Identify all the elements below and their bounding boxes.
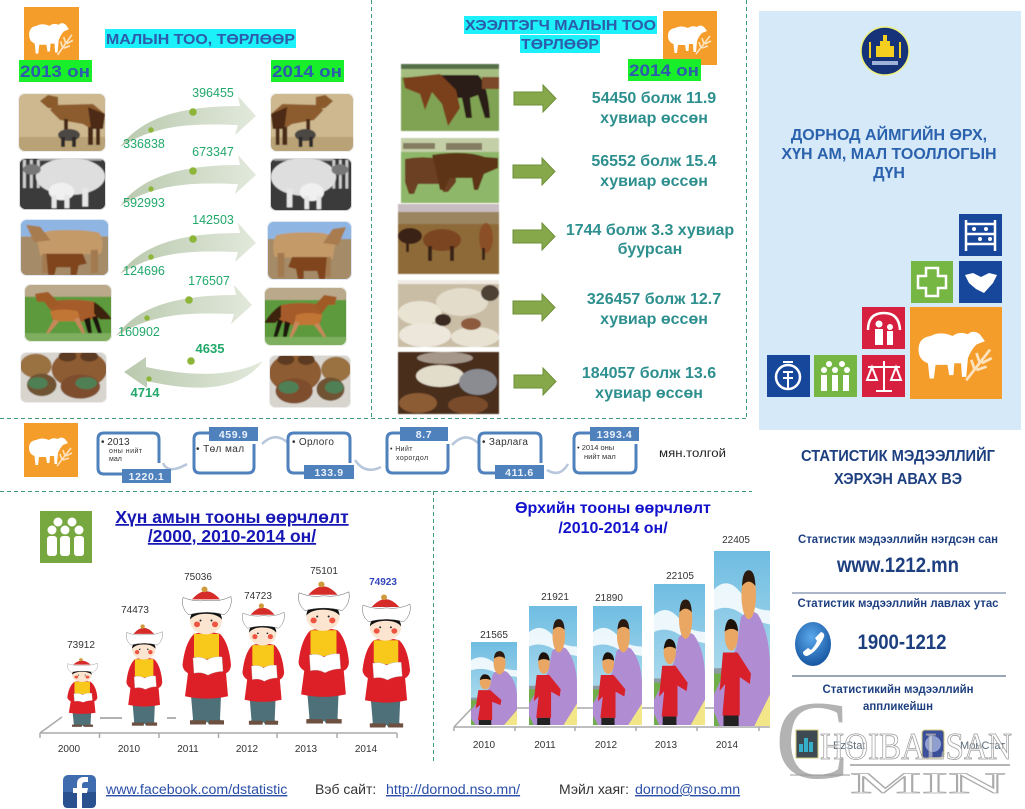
icon: facebook [63,775,96,808]
value labels [67,566,397,651]
bar: 2010 [471,642,517,725]
value labels: 74473 [121,605,149,616]
connectors [163,437,568,473]
heading line 2: ХЭРХЭН АВАХ ВЭ [834,471,962,488]
heading: population change: /2000, 2010-2014 он/ [148,526,316,546]
arrow: sheep [513,294,555,321]
icon: sheep [663,11,717,65]
photo: goats [398,352,499,414]
figure: 2013 [298,581,349,724]
text: sheep change: 326457 болж 12.7 [587,291,721,308]
flow box: 2014 total: нийт мал [584,452,616,461]
panel: how to get statistics [792,446,1006,758]
bar: 2012 [593,606,642,725]
chart axis [454,708,770,731]
photo: mares [401,64,499,131]
bar: 2014 [714,551,770,726]
heading: report title: ДОРНОД АЙМГИЙН ӨРХ, [791,127,987,144]
arrow: camels: 4635 [196,341,224,356]
icon: people [814,355,857,397]
value labels: 74923 [369,577,397,588]
text: phone number: 1900-1212 [858,631,946,654]
icon: health cross [911,261,953,303]
value labels: 22105 [666,571,694,582]
text: MonStat: МонСтат [960,740,1005,752]
photo: horses 2014 [264,287,347,346]
panel: report cover [759,11,1021,430]
year labels [473,740,739,751]
text: application label: Статистикийн мэдээллийн [822,682,974,696]
year labels: 2012 [236,744,259,755]
value labels: 73912 [67,640,95,651]
arrow: horses: 176507 [188,274,230,288]
arrow: camels [124,341,263,400]
heading: how to get statistics: СТАТИСТИК МЭДЭЭЛЛИЙГ [801,446,995,465]
icon: medal [767,355,810,397]
year labels: 2000 [58,744,81,755]
icon: statistics emblem [861,27,909,75]
icon: phone [795,622,831,666]
text: phone label: Статистик мэдээллийн лавлах утас [798,596,999,610]
flow box: 2013 total: 1220.1 [129,471,164,483]
value labels: 21921 [541,592,569,603]
label: email: Мэйл хаяг: [559,781,629,797]
icon: EzStat [796,730,818,758]
panel: population chart [40,507,410,755]
arrow: sheep: 673347 [192,145,234,159]
flow box: 2014 total [574,427,639,473]
text: mares change: хувиар өссөн [600,110,708,127]
photo: camels 2014 [269,353,351,408]
photo: horses 2013 [24,284,112,342]
text: cows change: 56552 болж 15.4 [591,153,717,170]
icon: handshake [959,261,1002,303]
flow box: income [288,433,354,479]
flow box: 2014 total: • 2014 оны [577,443,614,452]
flow box: expense: 411.6 [505,467,534,479]
icon: sheep large [910,307,1002,399]
link: facebook: www.facebook.com/dstatistic [105,782,287,798]
arrow: goats [514,368,556,395]
label: 2013: 2013 он [20,62,90,81]
icon: MonStat [922,730,944,758]
icon: scales [862,355,905,397]
panel: households chart [454,500,770,751]
photo: goats 2013 [18,93,106,152]
figure: 2011 [182,586,231,725]
text: camels change: 1744 болж 3.3 хувиар [566,222,734,239]
year labels: 2011 [534,740,556,751]
heading: breeding stock [464,16,657,53]
text: cows change: хувиар өссөн [600,173,708,190]
value labels: 74723 [244,591,272,602]
flow box: newborn: • Төл мал [196,444,244,455]
arrow: goats: 336838 [123,137,165,151]
arrow: cows [513,158,555,185]
photo: camels [398,204,499,274]
link: email: dornod@nso.mn [635,782,740,798]
text: sheep change: хувиар өссөн [600,311,708,328]
photo: white sheep 2013 [19,158,106,210]
text: application label line 2: аппликейшн [863,699,933,713]
chart axis [40,717,397,738]
flow box: expense: • Зарлага [482,437,528,448]
label: 2014: 2014 он [629,61,699,80]
flow box: newborn: 459.9 [219,429,248,441]
text: camels change: буурсан [618,241,682,258]
year labels: 2010 [473,740,496,751]
icon: people [40,511,92,563]
year labels: 2013 [295,744,318,755]
flow box: expense [479,433,544,479]
photo: sheep [398,280,499,347]
year labels: 2014 [355,744,378,755]
text: website: www.1212.mn [836,554,959,577]
arrow: cattle [120,213,256,278]
year labels: 2010 [118,744,141,755]
arrow: sheep: 592993 [123,196,165,210]
flow box: income: • Орлого [292,437,334,448]
arrow: camels: 4714 [131,385,160,400]
value labels: 75101 [310,566,338,577]
year labels [58,744,378,755]
value labels [480,535,750,641]
arrow: cattle: 142503 [192,213,234,227]
watermark [775,679,1012,803]
flow box: losses: хорогдол [396,455,428,462]
figure: 2012 [242,603,284,725]
heading: breeding stock: ХЭЭЛТЭГЧ МАЛЫН ТОО [465,17,656,34]
flow box: 2014 total: 1393.4 [597,429,632,441]
year labels: 2013 [655,740,678,751]
photo: cattle 2013 [20,219,109,276]
bar: 2013 [654,584,705,725]
arrow: sheep [120,145,256,210]
panel: livestock by type 2013 vs 2014 [18,7,354,408]
year labels: 2011 [177,744,199,755]
link: website: http://dornod.nso.mn/ [386,782,520,798]
photo: cattle 2014 [267,221,352,280]
label: website: Вэб сайт: [315,781,376,797]
text: goats change: хувиар өссөн [595,385,703,402]
flow box: losses [387,427,448,473]
unit label: мян.толгой [659,448,726,460]
watermark: C [775,679,850,803]
arrow: goats: 396455 [192,86,234,100]
heading: households change: Өрхийн тооны өөрчлөлт [515,500,711,517]
heading: population change: Хүн амын тооны өөрчлөлт [115,507,349,527]
arrow: horses: 160902 [118,325,160,339]
text: mares change: 54450 болж 11.9 [592,90,716,107]
figure: 2010 [126,624,163,726]
arrow: horses [116,274,252,339]
text: EzStat: EzStat [833,740,865,752]
footer contacts [63,775,740,808]
heading: report title: ХҮН АМ, МАЛ ТООЛЛОГЫН [781,146,997,163]
photo: cows [401,138,499,203]
heading: report title: ДҮН [873,165,905,182]
value labels: 22405 [722,535,750,546]
flow box: losses: 8.7 [416,429,432,441]
heading: households change: /2010-2014 он/ [558,520,668,537]
icon: sheep [24,7,79,67]
figure: 2000 [67,658,98,727]
flow box: newborn [194,427,258,473]
arrow: mares [514,85,556,112]
heading: livestock by type: МАЛЫН ТОО, ТӨРЛӨӨР [106,31,295,48]
text: database label: Статистик мэдээллийн нэгдсэн сан [798,532,998,546]
photo: goats 2014 [270,93,354,152]
arrow: cattle: 124696 [123,264,165,278]
bar: 2011 [529,606,577,725]
flow box: losses: • Нийт [390,445,413,453]
flow box: 2013 total: оны нийт [109,447,143,455]
panel: livestock flow [24,423,726,483]
heading: breeding stock: ТӨРЛӨӨР [521,36,599,53]
flow box: 2013 total: • 2013 [101,437,130,448]
panel: breeding stock by type [398,11,734,414]
icon: abacus [959,214,1002,256]
value labels: 21565 [480,630,508,641]
text: goats change: 184057 болж 13.6 [582,365,716,382]
figure: 2014 [362,594,410,728]
icon: family red [862,307,905,349]
photo: camels 2013 [20,350,107,403]
watermark: MIN [850,767,1006,800]
flow box: income: 133.9 [314,467,344,479]
arrow: camels [513,223,555,250]
photo: white sheep 2014 [270,158,352,211]
icon: sheep [24,423,78,477]
value labels: 21890 [595,593,623,604]
flow box: 2013 total: мал [109,456,122,463]
flow box: 2013 total [98,433,171,483]
arrow: goats [120,86,256,151]
label: 2014: 2014 он [272,62,342,81]
year labels: 2012 [595,740,618,751]
year labels: 2014 [716,740,739,751]
value labels: 75036 [184,572,212,583]
